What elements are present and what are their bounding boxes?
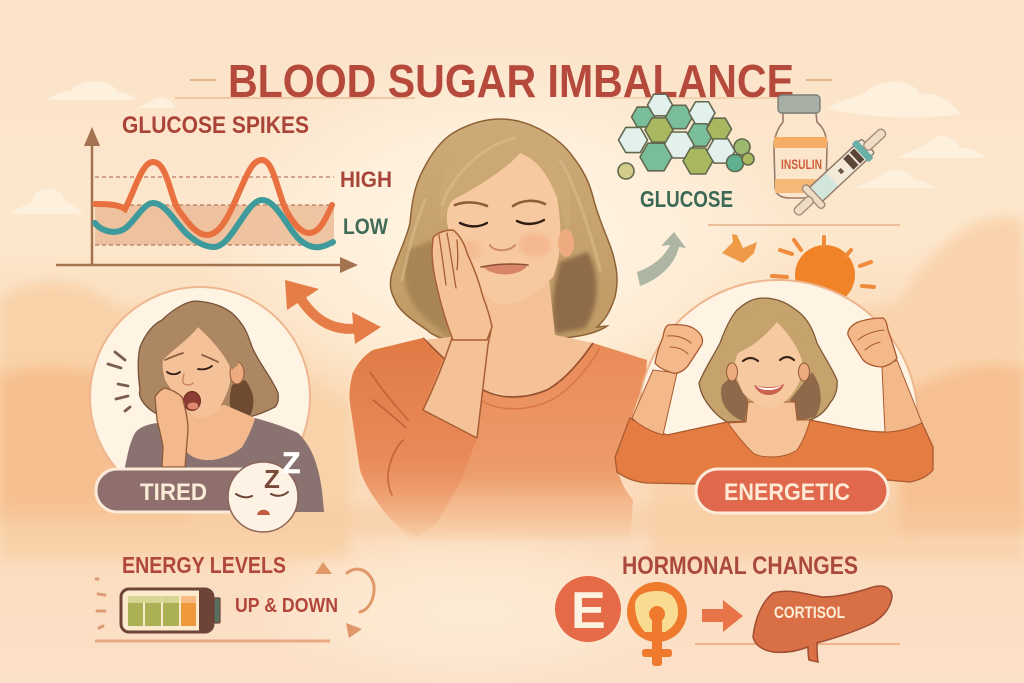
tired circle xyxy=(90,287,310,507)
icon: estrogen E: E xyxy=(571,582,606,640)
panel: glucose spikes chart xyxy=(56,112,392,273)
main figure xyxy=(350,119,647,545)
icon: sleepy face: Z xyxy=(282,447,300,480)
nose and mouth xyxy=(481,245,528,274)
icon: sleepy face xyxy=(228,447,300,532)
icon: liver cortisol: CORTISOL xyxy=(774,603,845,622)
motion dashes xyxy=(96,579,105,628)
icon: syringe xyxy=(786,120,894,224)
neck xyxy=(728,402,810,457)
right fist xyxy=(848,318,897,367)
face xyxy=(735,322,802,408)
tired woman xyxy=(120,301,324,512)
threshold lines xyxy=(95,177,334,245)
label: glucose: GLUCOSE xyxy=(640,186,733,212)
sweater xyxy=(615,418,933,484)
label: energetic pill xyxy=(696,469,888,513)
ears xyxy=(726,363,810,381)
face xyxy=(447,153,560,305)
sweater xyxy=(350,338,647,545)
hand on cheek xyxy=(432,230,492,340)
neck and chest xyxy=(423,270,593,397)
heading: HORMONAL CHANGES xyxy=(622,552,858,580)
energetic woman xyxy=(615,298,933,484)
icon: estrogen E xyxy=(555,576,621,642)
right fist fingers xyxy=(858,330,884,350)
hair xyxy=(138,301,278,419)
icon: insulin vial: INSULIN xyxy=(781,156,822,172)
icon: battery xyxy=(121,588,220,632)
label: tired pill: TIRED xyxy=(140,479,207,506)
icon: venus symbol xyxy=(627,582,687,666)
left fist xyxy=(655,325,703,373)
panel: tired xyxy=(90,287,324,532)
ear xyxy=(558,229,574,257)
forearm xyxy=(423,325,492,438)
icon: liver cortisol xyxy=(753,586,892,662)
clouds xyxy=(11,81,986,214)
sweater rib xyxy=(480,348,600,409)
sweater xyxy=(120,418,324,512)
label: energetic pill: ENERGETIC xyxy=(724,479,850,506)
sleeve xyxy=(350,338,477,537)
label: up and down: UP & DOWN xyxy=(235,595,338,617)
hair back xyxy=(390,119,617,343)
icon: insulin vial xyxy=(774,95,827,198)
teeth xyxy=(756,385,782,390)
panel: hormonal changes xyxy=(555,552,900,666)
icon: sun xyxy=(772,237,874,305)
title: BLOOD SUGAR IMBALANCE xyxy=(228,55,794,107)
arrow xyxy=(702,600,743,632)
yawn dashes xyxy=(108,352,130,411)
insulin curve xyxy=(95,200,333,247)
title side rules xyxy=(175,80,900,225)
label low: LOW xyxy=(343,214,388,239)
eyes and brows xyxy=(743,357,794,361)
hexagon cluster xyxy=(618,94,754,179)
tongue xyxy=(188,402,198,410)
hair xyxy=(699,298,837,422)
arrow: two-way between chart and woman xyxy=(285,280,381,344)
neck xyxy=(175,405,255,460)
fringe xyxy=(731,309,806,365)
glucose curve xyxy=(95,160,332,235)
cheek blush xyxy=(519,233,551,257)
hair fringe xyxy=(439,133,571,232)
panel: glucose molecule xyxy=(618,94,754,179)
left fist fingers xyxy=(667,336,691,354)
fringe xyxy=(162,316,238,370)
smile xyxy=(754,384,784,395)
normal range band xyxy=(95,205,334,245)
panel: energy levels xyxy=(95,552,374,641)
panel: energetic xyxy=(614,234,934,514)
heading: ENERGY LEVELS xyxy=(122,552,286,578)
face details xyxy=(165,353,218,385)
hair shadow xyxy=(230,380,253,418)
label: tired pill xyxy=(96,469,268,512)
hair highlights xyxy=(402,138,600,280)
hair shadow xyxy=(721,372,821,422)
finger lines xyxy=(439,233,458,288)
ear xyxy=(230,362,244,384)
face xyxy=(163,327,230,418)
divider xyxy=(695,643,900,645)
energetic circle xyxy=(638,279,918,434)
chart heading: GLUCOSE SPIKES xyxy=(122,112,309,139)
right arm xyxy=(882,360,922,432)
hair shadow xyxy=(404,240,597,338)
icon: small sugar cube xyxy=(722,234,757,263)
yawning mouth xyxy=(184,392,200,410)
icon: sleepy face: Z xyxy=(264,464,280,494)
collar line xyxy=(423,338,593,397)
left arm xyxy=(632,370,677,435)
label high: HIGH xyxy=(340,167,392,192)
eyes and brows xyxy=(455,201,545,226)
up-down arrows xyxy=(315,562,374,638)
axes xyxy=(56,127,358,273)
arrow: up to glucose xyxy=(637,232,686,286)
sleeve folds xyxy=(370,372,408,495)
hand xyxy=(155,388,188,467)
